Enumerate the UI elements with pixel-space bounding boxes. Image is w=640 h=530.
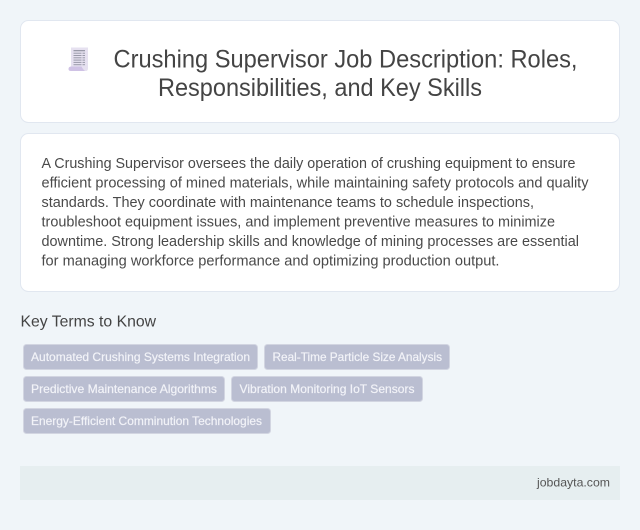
- panel: header: [20, 20, 620, 122]
- tag: vibration monitoring: [232, 376, 422, 402]
- title: [114, 46, 578, 102]
- title: Responsibilities, and Key Skills: [158, 74, 482, 102]
- panel: description: [20, 134, 620, 292]
- tag: automated crushing: Automated Crushing Systems Integration: [31, 350, 250, 364]
- text block: description: standards. They coordinate with maintenance teams to schedule inspections,: [42, 195, 534, 211]
- text block: description: [42, 156, 589, 270]
- text block: description: for managing workforce performance and optimizing production output.: [42, 254, 499, 270]
- tag: predictive maintenance: Predictive Maintenance Algorithms: [31, 382, 217, 396]
- text block: description: efficient processing of mined materials, while maintaining safety protocols and quality: [42, 176, 589, 192]
- tag: particle size: [264, 344, 450, 370]
- heading: key terms: Key Terms to Know: [20, 314, 156, 330]
- footer: jobdayta.com: [536, 476, 610, 490]
- text block: description: downtime. Strong leadership skills and knowledge of mining processes are essential: [42, 234, 579, 250]
- tag: energy-efficient: Energy-Efficient Comminution Technologies: [31, 414, 262, 428]
- footer: [20, 466, 620, 500]
- icon: document scroll: [68, 48, 88, 71]
- tag: vibration monitoring: Vibration Monitoring IoT Sensors: [240, 382, 414, 396]
- text block: description: A Crushing Supervisor oversees the daily operation of crushing equipment to ensure: [42, 156, 576, 172]
- text block: description: troubleshoot equipment issues, and implement preventive measures to minimize: [42, 214, 555, 230]
- tag: predictive maintenance: [24, 376, 224, 402]
- title: Crushing Supervisor Job Description: Roles,: [114, 46, 578, 74]
- tag list: [24, 344, 450, 434]
- tag: particle size: Real-Time Particle Size Analysis: [272, 350, 442, 364]
- tag: energy-efficient: [24, 408, 270, 434]
- tag: automated crushing: [24, 344, 258, 370]
